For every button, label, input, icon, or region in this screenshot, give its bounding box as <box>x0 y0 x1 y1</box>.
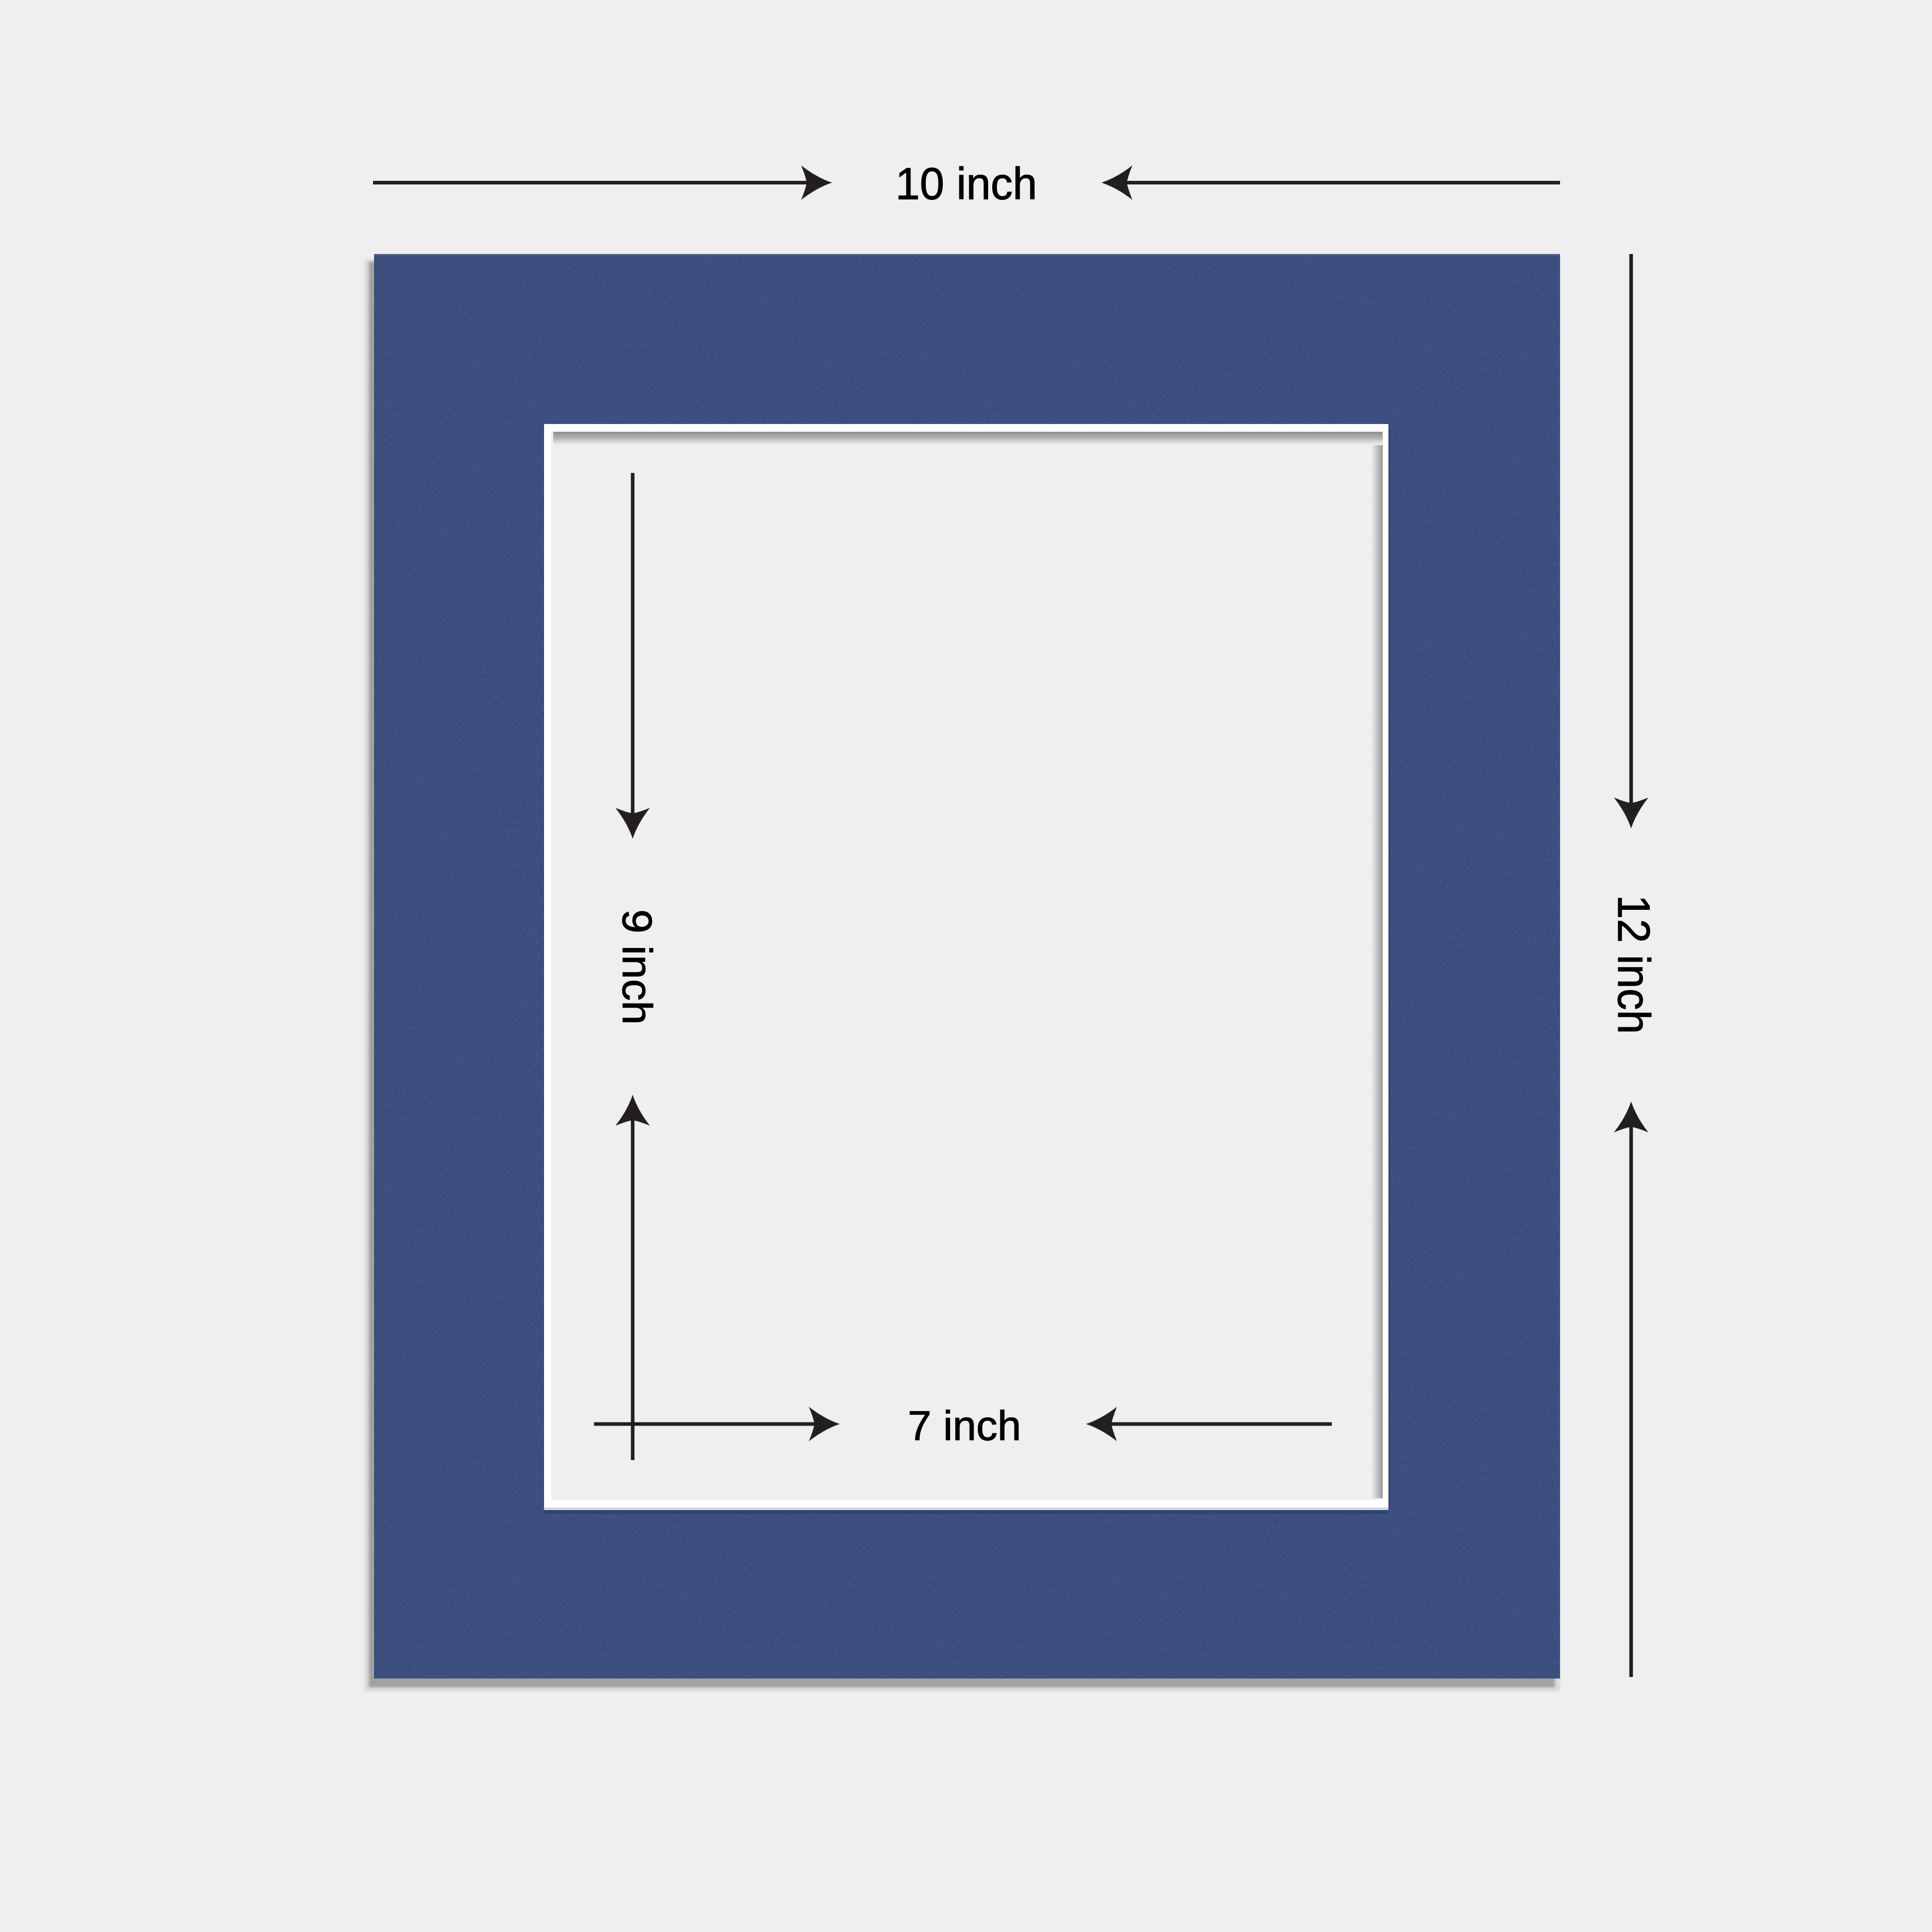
window bevel shadow on mat <box>544 1510 1388 1514</box>
inner shadow top <box>553 432 1383 445</box>
arrow: 12 inch bottom <box>1614 1101 1649 1677</box>
arrow: 10 inch right <box>1101 165 1560 200</box>
label: 12 inch: 12 inch <box>1608 895 1659 1034</box>
arrow: 12 inch top <box>1614 254 1649 828</box>
mat top edge highlight <box>374 254 1560 256</box>
label: 9 inch: 9 inch <box>614 909 660 1025</box>
arrow: 7 inch left <box>594 1406 840 1442</box>
arrow: 9 inch bottom <box>615 1095 650 1460</box>
arrow: 9 inch top <box>615 473 650 839</box>
arrow: 7 inch right <box>1086 1406 1332 1442</box>
panel: blue mat board with window <box>365 254 1560 1691</box>
mat drop shadow <box>365 259 1560 1691</box>
label: 7 inch: 7 inch <box>908 1403 1021 1449</box>
mat board surface <box>374 254 1560 1679</box>
inner shadow right <box>1370 432 1383 1498</box>
label: 10 inch: 10 inch <box>895 159 1037 209</box>
window opening with white bevel <box>544 424 1390 1510</box>
arrow: 10 inch left <box>373 165 832 200</box>
